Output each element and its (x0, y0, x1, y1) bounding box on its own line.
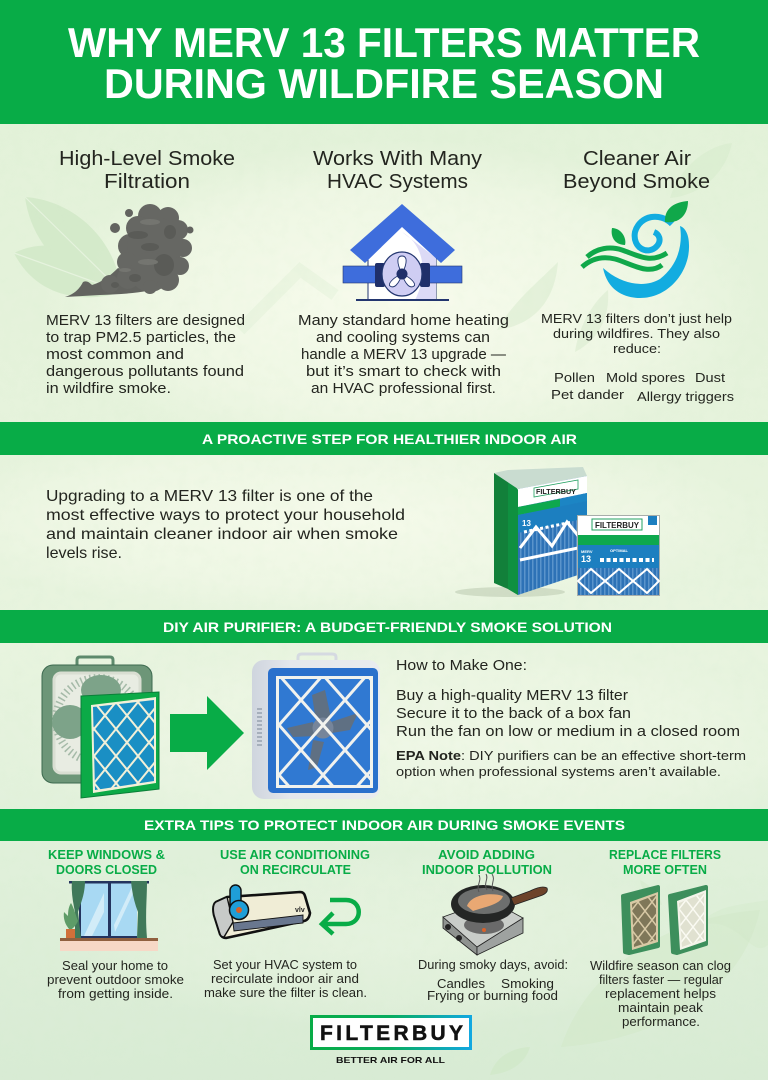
panel: cleaner air beyond smoke (541, 147, 735, 404)
logo: Filterbuy: BETTER AIR FOR ALL (336, 1055, 445, 1065)
heading: cleaner air: Cleaner Air (583, 147, 691, 170)
title banner: DURING WILDFIRE SEASON (104, 60, 664, 107)
text: upgrade paragraph: levels rise. (46, 545, 122, 562)
text: cleaner air intro (541, 311, 732, 356)
section bar: proactive step (0, 422, 768, 455)
icon: assembled DIY purifier (252, 654, 380, 799)
text: cleaner air intro: during wildfires. They also (553, 326, 720, 341)
text: HVAC systems: an HVAC professional first. (311, 381, 496, 397)
text: smoke filtration: MERV 13 filters are designed (46, 313, 245, 329)
heading: air conditioning (220, 848, 370, 877)
heading: HVAC systems: HVAC Systems (327, 170, 468, 193)
text: smoke filtration: most common and (46, 347, 184, 363)
list: pollutants reduced: Dust (695, 370, 725, 385)
text: HVAC systems: and cooling systems can (316, 330, 490, 346)
text: avoid list: Candles (437, 977, 485, 991)
text: replace filters: Wildfire season can clog (590, 959, 731, 973)
heading: windows: KEEP WINDOWS & (48, 848, 165, 862)
heading: indoor pollution: AVOID ADDING (438, 848, 535, 862)
text: HVAC systems: handle a MERV 13 upgrade — (301, 347, 507, 363)
text: cleaner air intro: MERV 13 filters don’t just help (541, 311, 732, 326)
text: replace filters: maintain peak (618, 1001, 704, 1015)
text: EPA note: EPA Note (396, 748, 461, 763)
image: Filterbuy product boxes (455, 467, 660, 597)
text: EPA note (396, 748, 746, 779)
icon: dirty and clean filters (623, 887, 706, 953)
section bar: extra tips (0, 809, 768, 841)
heading: indoor pollution: INDOOR POLLUTION (422, 863, 552, 877)
text: windows (47, 959, 184, 1001)
text: avoid list (418, 958, 568, 1003)
heading: replace filters: REPLACE FILTERS (609, 848, 721, 862)
section bar: DIY air purifier (0, 610, 768, 643)
section bar: extra tips: EXTRA TIPS TO PROTECT INDOOR AIR DURING SMOKE EVENTS (144, 817, 625, 833)
heading: HVAC systems (313, 147, 483, 193)
icon: air swirl with leaves (582, 201, 689, 298)
text: EPA note: option when professional systems aren’t available. (396, 764, 721, 779)
text: HVAC systems: but it’s smart to check with (306, 364, 501, 380)
text: replace filters: filters faster — regular (599, 973, 723, 987)
text: upgrade paragraph (46, 488, 405, 562)
text: upgrade paragraph: most effective ways to protect your household (46, 507, 405, 524)
text: smoke filtration: dangerous pollutants found (46, 364, 244, 380)
section bar: proactive step: A PROACTIVE STEP FOR HEALTHIER INDOOR AIR (202, 431, 577, 447)
text: air conditioning: recirculate indoor air and (211, 972, 359, 986)
heading: windows: DOORS CLOSED (56, 863, 157, 877)
image: Filterbuy product boxes: OPTIMAL (610, 548, 629, 553)
text: upgrade paragraph: and maintain cleaner indoor air when smoke (46, 526, 398, 543)
text: air conditioning: make sure the filter is clean. (204, 986, 367, 1000)
text: avoid list: Smoking (501, 977, 554, 991)
panel: works with many HVAC systems (298, 147, 509, 397)
icon: smoke plume (65, 204, 194, 297)
image: Filterbuy product boxes: 13 (522, 519, 531, 528)
title banner (0, 0, 768, 124)
tip: avoid indoor pollution (418, 848, 568, 1003)
heading: cleaner air (563, 147, 710, 193)
panel: high-level smoke filtration (46, 147, 245, 397)
image: Filterbuy product boxes: MERV (581, 549, 593, 554)
text: windows: Seal your home to (62, 959, 168, 973)
heading: replace filters (609, 848, 721, 877)
image: Filterbuy product boxes: FILTERBUY (536, 489, 576, 496)
text: smoke filtration: to trap PM2.5 particles, the (46, 330, 236, 346)
text: avoid list: During smoky days, avoid: (418, 958, 568, 972)
text: smoke filtration (46, 313, 245, 397)
heading: smoke filtration (59, 147, 235, 193)
list: pollutants reduced (551, 370, 735, 404)
tip: use air conditioning (204, 848, 370, 1000)
icon: recirculate arrow (322, 900, 359, 934)
heading: indoor pollution (422, 848, 552, 877)
logo: Filterbuy: FILTERBUY (320, 1022, 463, 1045)
text: windows: from getting inside. (58, 987, 173, 1001)
text: air conditioning: Set your HVAC system to (213, 958, 357, 972)
text: HVAC systems (298, 313, 509, 397)
heading: air conditioning: ON RECIRCULATE (240, 863, 351, 877)
text: replace filters (590, 959, 731, 1029)
heading: air conditioning: USE AIR CONDITIONING (220, 848, 370, 862)
list: pollutants reduced: Pollen (554, 370, 595, 385)
text: cleaner air intro: reduce: (613, 341, 661, 356)
arrow: fan to purifier (170, 696, 244, 770)
text: how to make one (396, 658, 740, 740)
image: Filterbuy product boxes: FILTERBUY (595, 520, 639, 530)
text: avoid list: Frying or burning food (427, 989, 558, 1003)
text: upgrade paragraph: Upgrading to a MERV 13 filter is one of the (46, 488, 373, 505)
text: how to make one: Secure it to the back of a box fan (396, 706, 631, 722)
icon: wall AC with thermometer: vlv (295, 907, 305, 914)
text: how to make one: Run the fan on low or medium in a closed room (396, 724, 740, 740)
list: pollutants reduced: Pet dander (551, 387, 625, 402)
text: windows: prevent outdoor smoke (47, 973, 184, 987)
icon: window with curtains (60, 881, 158, 951)
text: HVAC systems: Many standard home heating (298, 313, 509, 329)
title banner: WHY MERV 13 FILTERS MATTER (68, 19, 700, 66)
text: replace filters: replacement helps (605, 987, 716, 1001)
icon: box fan with filter (42, 657, 159, 798)
heading: replace filters: MORE OFTEN (623, 863, 707, 877)
icon: frying pan on stove (443, 874, 547, 955)
text: EPA note: : DIY purifiers can be an effective short-term (461, 748, 746, 763)
heading: cleaner air: Beyond Smoke (563, 170, 710, 193)
icon: wall AC with thermometer (213, 885, 310, 938)
section bar: DIY air purifier: DIY AIR PURIFIER: A BUDGET-FRIENDLY SMOKE SOLUTION (163, 619, 612, 635)
icon: house with fan (343, 204, 462, 301)
heading: windows (48, 848, 165, 877)
text: how to make one: Buy a high-quality MERV 13 filter (396, 688, 628, 704)
heading: smoke filtration: Filtration (104, 170, 190, 193)
image: Filterbuy product boxes: 13 (581, 554, 591, 564)
logo: Filterbuy (312, 1016, 470, 1065)
list: pollutants reduced: Mold spores (606, 370, 686, 385)
text: smoke filtration: in wildfire smoke. (46, 381, 171, 397)
tip: replace filters more often (590, 848, 731, 1029)
text: air conditioning (204, 958, 367, 1000)
heading: HVAC systems: Works With Many (313, 147, 483, 170)
tip: keep windows closed (47, 848, 184, 1001)
text: replace filters: performance. (622, 1015, 700, 1029)
list: pollutants reduced: Allergy triggers (637, 389, 735, 404)
text: how to make one: How to Make One: (396, 658, 527, 674)
heading: smoke filtration: High-Level Smoke (59, 147, 235, 170)
